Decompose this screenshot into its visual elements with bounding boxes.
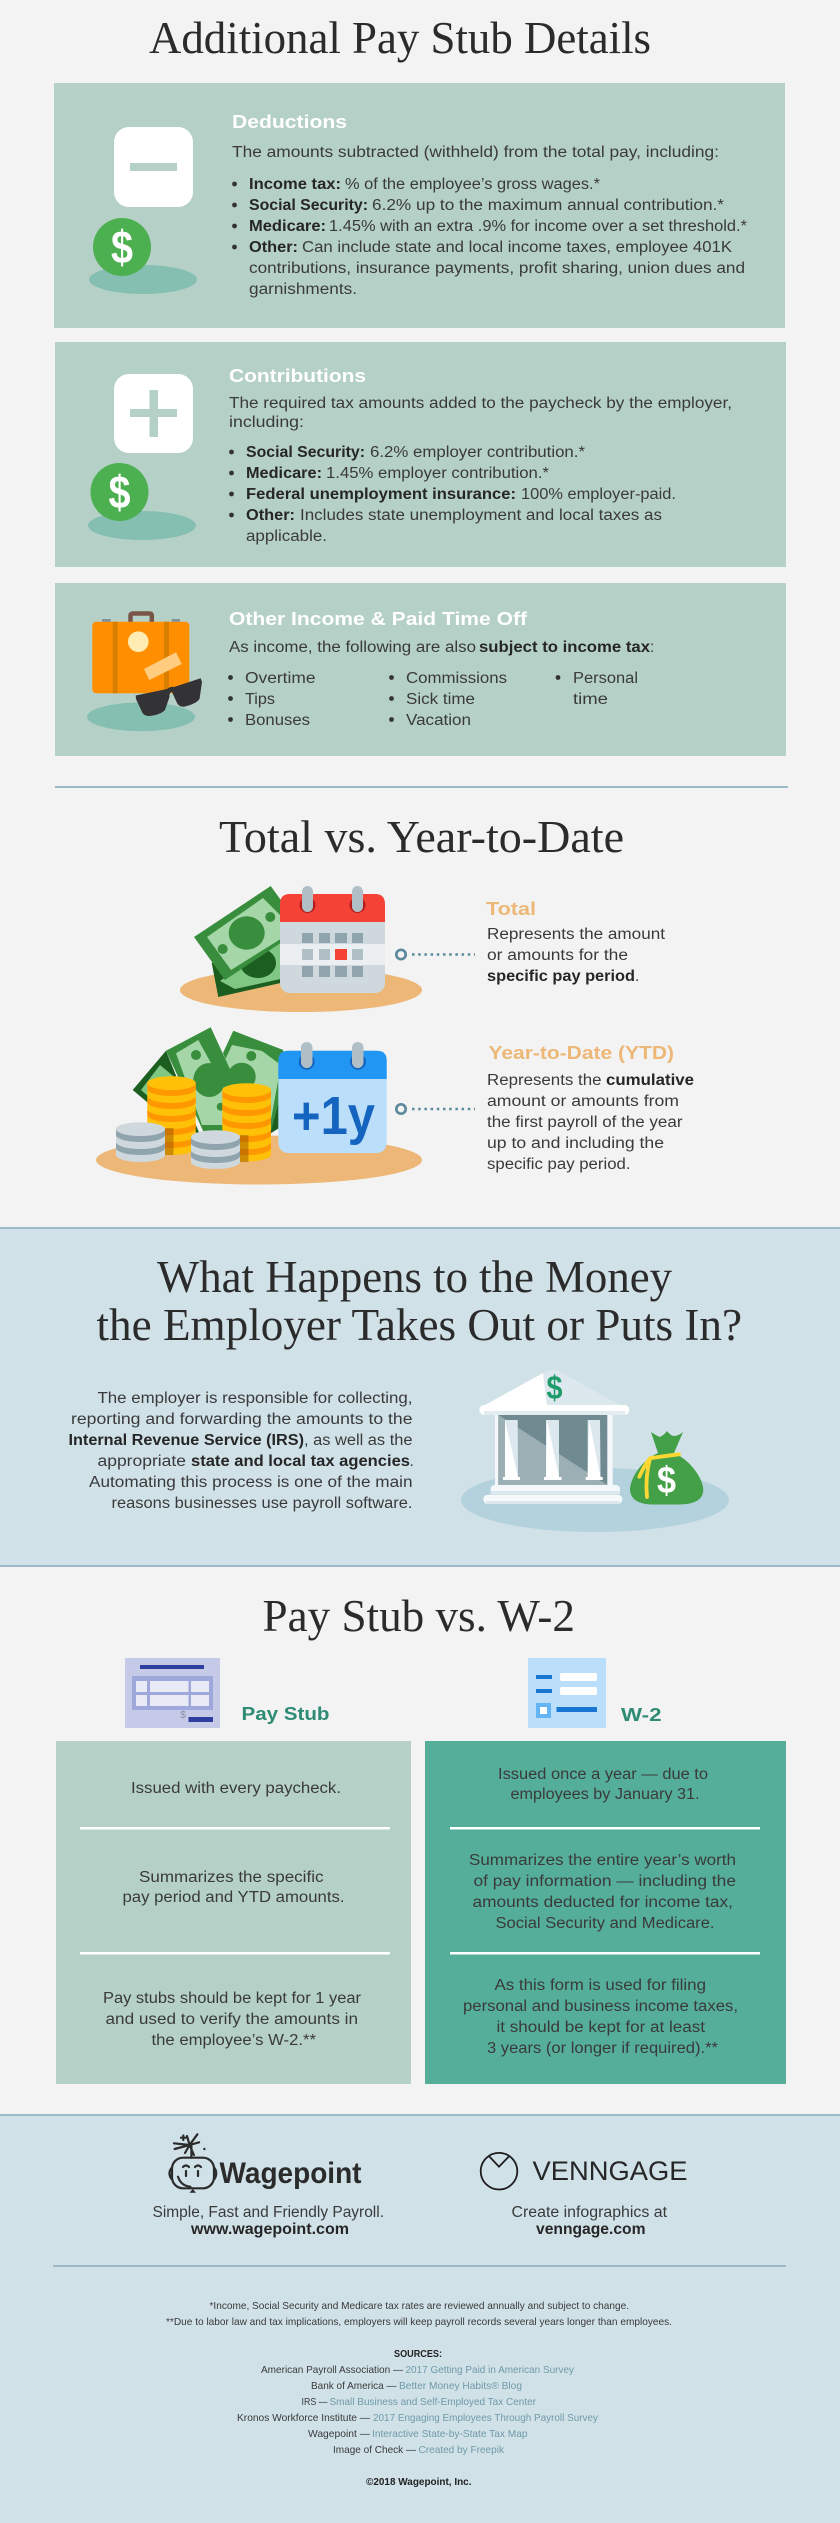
heading: what happens to the money: the Employer Takes Out or Puts In? [96, 1300, 742, 1350]
list: contributions: Other: [246, 507, 295, 524]
list: deductions: Can include state and local income taxes, employee 401K [302, 239, 733, 256]
text block: year-to-date: cumulative [606, 1072, 694, 1089]
text: summarizes pay period [122, 1869, 344, 1906]
text: employer responsibility: appropriate [98, 1453, 186, 1470]
list: other income items: Vacation [406, 712, 471, 729]
text: issued once a year [498, 1766, 708, 1803]
text block: year-to-date: specific pay period. [487, 1156, 630, 1173]
text: other income intro [229, 639, 654, 656]
list: other income items: Overtime [245, 670, 316, 687]
text block: year-to-date: up to and including the [487, 1135, 664, 1152]
list: contributions: Federal unemployment insurance: [246, 486, 516, 503]
list: contributions: Includes state unemployment and local taxes as [300, 507, 662, 524]
panel: contributions [55, 342, 786, 567]
calendar: plus one year [278, 1042, 387, 1153]
list: other income items: Personal [573, 670, 638, 687]
text: employer responsibility [68, 1390, 414, 1512]
logo: Wagepoint: Wagepoint [220, 2157, 362, 2190]
list: deductions: Other: [249, 239, 298, 256]
text block: total: or amounts for the [487, 947, 628, 964]
panel: what happens to the money [0, 1227, 840, 1567]
text: issued once a year: employees by January 31. [510, 1786, 700, 1803]
text: sources: Created by Freepik [418, 2444, 505, 2456]
text block: year-to-date: Represents the [487, 1072, 602, 1089]
text: contributions intro [229, 395, 732, 431]
list: deductions: 6.2% up to the maximum annual contribution.* [372, 197, 724, 214]
list: other income items: Tips [245, 691, 275, 708]
text: keep pay stubs: Pay stubs should be kept for 1 year [103, 1990, 361, 2007]
text: sources: Small Business and Self-Employed Tax Center [330, 2396, 536, 2408]
text: summarizes entire year [469, 1852, 736, 1932]
icon: W-2 form [528, 1658, 606, 1728]
text: other income intro: subject to income tax [479, 639, 650, 656]
text: sources: Better Money Habits® Blog [399, 2380, 522, 2392]
text: summarizes entire year: amounts deducted for income tax, [472, 1894, 733, 1911]
icon: plus with coin: $ [108, 466, 130, 518]
text: sources: SOURCES: [394, 2348, 442, 2360]
list: deductions: contributions, insurance payments, profit sharing, union dues and [249, 260, 745, 277]
text: keep W-2 form: 3 years (or longer if required).** [487, 2040, 718, 2057]
text: sources: Bank of America — [311, 2380, 397, 2392]
text: keep W-2 form: personal and business income taxes, [463, 1998, 738, 2015]
text: summarizes pay period: Summarizes the specific [139, 1869, 324, 1886]
text block: total: . [635, 968, 639, 985]
list: contributions [229, 444, 676, 545]
text block: total: Represents the amount [487, 926, 666, 943]
text: employer responsibility: reasons businesses use payroll software. [112, 1495, 412, 1512]
list: deductions [232, 176, 747, 298]
panel: footer [0, 2114, 840, 2523]
text: keep pay stubs: and used to verify the amounts in [106, 2011, 358, 2028]
icon: plus with coin [88, 374, 196, 540]
logo: Venngage [481, 2153, 688, 2190]
icon: minus with coin: $ [111, 221, 133, 273]
text: footnotes [166, 2300, 672, 2328]
label: Pay Stub: Pay Stub [242, 1704, 330, 1724]
list: other income items: Sick time [406, 691, 475, 708]
text: employer responsibility: , as well as the [304, 1432, 412, 1449]
text block: year-to-date: amount or amounts from [487, 1093, 679, 1110]
text: Wagepoint tagline [152, 2204, 384, 2238]
text block: year-to-date: Year-to-Date (YTD) [488, 1043, 674, 1063]
logo: Wagepoint [170, 2134, 362, 2193]
heading: what happens to the money [96, 1252, 742, 1350]
text: employer responsibility: Automating this process is one of the main [89, 1474, 412, 1491]
list: deductions: % of the employee’s gross wages.* [345, 176, 600, 193]
text: keep W-2 form: it should be kept for at least [496, 2019, 706, 2036]
list: other income items: Commissions [406, 670, 507, 687]
panel: deductions [54, 83, 785, 328]
text: employer responsibility: . [410, 1453, 414, 1470]
list: deductions: Social Security: [249, 197, 368, 214]
illustration: bank and money bag [461, 1369, 729, 1532]
connector: year-to-date [396, 1104, 475, 1114]
calendar: plus one year: +1y [292, 1086, 375, 1146]
heading: what happens to the money: What Happens to the Money [157, 1252, 672, 1302]
text: sources: American Payroll Association — [261, 2364, 403, 2376]
text: summarizes entire year: Social Security and Medicare. [496, 1915, 714, 1932]
heading: Deductions: Deductions [232, 112, 347, 132]
text: footnotes: *Income, Social Security and Medicare tax rates are reviewed annually and subject to change. [210, 2300, 629, 2312]
icon: minus with coin [89, 127, 197, 294]
text: Wagepoint tagline: Simple, Fast and Friendly Payroll. [152, 2204, 384, 2221]
text: keep pay stubs [103, 1990, 361, 2049]
list: deductions: Income tax: [249, 176, 341, 193]
text: footnotes: **Due to labor law and tax implications, employers will keep payroll records several years longer than employees. [166, 2316, 672, 2328]
text: keep pay stubs: the employee’s W-2.** [152, 2032, 316, 2049]
text: copyright: ©2018 Wagepoint, Inc. [366, 2476, 472, 2488]
panel: pay stub column [56, 1741, 411, 2084]
coins: right silver stack [191, 1130, 240, 1169]
text: sources: 2017 Engaging Employees Through Payroll Survey [373, 2412, 599, 2424]
text: employer responsibility: reporting and forwarding the amounts to the [71, 1411, 412, 1428]
list: contributions: 1.45% employer contribution.* [326, 465, 549, 482]
logo: Venngage: VENNGAGE [532, 2156, 688, 2186]
connector: total [396, 950, 475, 959]
text block: total [486, 899, 666, 985]
heading: Contributions: Contributions [229, 366, 366, 386]
text: sources: Image of Check — [333, 2444, 416, 2456]
text: employer responsibility: Internal Revenue Service (IRS) [68, 1432, 304, 1449]
text: employer responsibility: state and local tax agencies [191, 1453, 410, 1470]
text: keep W-2 form [463, 1977, 738, 2057]
list: other income items [228, 670, 638, 729]
text: summarizes entire year: of pay information — including the [474, 1873, 736, 1890]
label: W-2: W-2 [621, 1705, 662, 1725]
illustration: total, money and calendar [180, 886, 422, 1012]
list: contributions: 6.2% employer contribution.* [370, 444, 585, 461]
illustration: year-to-date, money, coins and calendar [96, 1027, 422, 1184]
text: other income intro: As income, the following are also [229, 639, 476, 656]
text: sources: IRS — [302, 2396, 328, 2408]
icon: pay stub document: $ [180, 1710, 186, 1721]
text: employer responsibility: The employer is responsible for collecting, [98, 1390, 412, 1407]
coins: right gold stack [222, 1083, 271, 1162]
text: deductions intro: The amounts subtracted (withheld) from the total pay, including: [232, 144, 719, 161]
text: Venngage tagline: Create infographics at [512, 2204, 668, 2221]
coins: left gold stack [147, 1076, 196, 1155]
text: other income intro: : [650, 639, 654, 656]
illustration: bank and money bag: $ [546, 1369, 562, 1406]
list: other income items: Bonuses [245, 712, 310, 729]
text block: total: specific pay period [487, 968, 635, 985]
panel: W-2 column [425, 1741, 786, 2084]
text: issued once a year: Issued once a year — due to [498, 1766, 708, 1783]
list: deductions: Medicare: [249, 218, 326, 235]
text: sources: Wagepoint — [308, 2428, 370, 2440]
list: contributions: applicable. [246, 528, 327, 545]
icon: suitcase and sunglasses [87, 614, 202, 731]
coins: left silver stack [116, 1122, 165, 1162]
text: sources: Interactive State-by-State Tax Map [372, 2428, 528, 2440]
illustration: bank and money bag: $ [657, 1460, 676, 1502]
text: Venngage tagline: venngage.com [536, 2221, 646, 2238]
text: contributions intro: The required tax amounts added to the paycheck by the employer, [229, 395, 732, 412]
text block: total: Total [486, 899, 536, 919]
text: sources: 2017 Getting Paid in American Survey [406, 2364, 575, 2376]
list: deductions: 1.45% with an extra .9% for income over a set threshold.* [329, 218, 747, 235]
title: Additional Pay Stub Details: Additional Pay Stub Details [149, 12, 651, 63]
text block: year-to-date: the first payroll of the year [487, 1114, 682, 1131]
text: Venngage tagline [512, 2204, 668, 2238]
text: contributions intro: including: [229, 414, 304, 431]
text: sources [237, 2348, 599, 2456]
text: issued with every paycheck: Issued with every paycheck. [131, 1780, 341, 1797]
list: deductions: garnishments. [249, 281, 357, 298]
text block: year-to-date [487, 1043, 694, 1173]
list: contributions: Social Security: [246, 444, 365, 461]
panel: other income and paid time off [55, 583, 786, 756]
icon: pay stub document [125, 1658, 220, 1728]
text: sources: Kronos Workforce Institute — [237, 2412, 370, 2424]
list: other income items: time [573, 691, 608, 708]
text: Wagepoint tagline: www.wagepoint.com [190, 2221, 349, 2238]
title: Pay Stub vs. W-2: Pay Stub vs. W-2 [262, 1590, 575, 1641]
list: contributions: 100% employer-paid. [521, 486, 676, 503]
text: keep W-2 form: As this form is used for filing [494, 1977, 706, 1994]
title: Total vs. Year-to-Date: Total vs. Year-to-Date [219, 811, 624, 862]
text: summarizes entire year: Summarizes the entire year’s worth [469, 1852, 736, 1869]
heading: Other Income & Paid Time Off: Other Income & Paid Time Off [229, 609, 528, 629]
text: summarizes pay period: pay period and YTD amounts. [122, 1889, 344, 1906]
list: contributions: Medicare: [246, 465, 322, 482]
